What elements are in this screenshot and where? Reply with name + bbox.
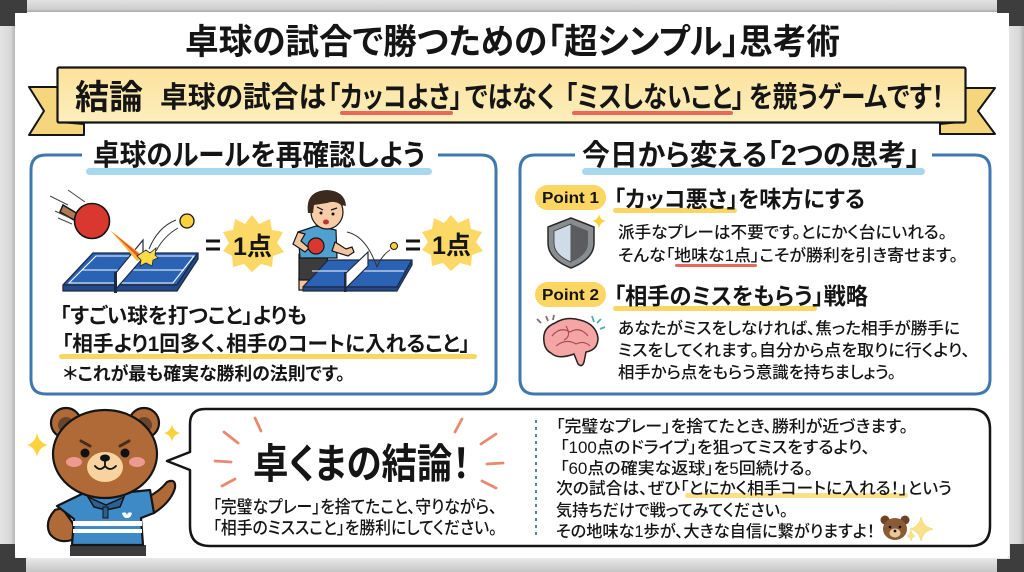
- closing message: 「完璧なプレー」を捨てたとき、勝利が近づきます。: [556, 416, 908, 436]
- closing message: 次の試合は、ぜひ「とにかく相手コートに入れる！」という: [556, 479, 952, 498]
- icon: shield: [548, 214, 606, 268]
- heading underline: [582, 168, 925, 175]
- underline: ミスしないこと: [572, 111, 733, 115]
- key rule text: 「相手より1回多く、相手のコートに入れること」: [62, 333, 470, 356]
- bubble heading: 卓くまの結論！: [253, 441, 470, 487]
- banner body: [58, 68, 966, 122]
- closing message: 気持ちだけで戦ってみてください。: [556, 501, 788, 520]
- equals sign: [406, 241, 420, 249]
- point 1 badge: Point 1: [542, 190, 599, 207]
- pants: [70, 545, 146, 556]
- panel: table tennis rules: [31, 139, 496, 394]
- ribbon tail: left: [29, 87, 84, 135]
- closing message: その地味な1歩が、大きな自信に繋がりますよ！: [556, 521, 875, 541]
- point 2 body: ミスをしてくれます。自分から点を取りに行くより、: [618, 341, 970, 360]
- point 2 body: [618, 318, 970, 382]
- bubble summary: 「完璧なプレー」を捨てたこと、守りながら、: [213, 497, 497, 517]
- left arm: [48, 508, 74, 541]
- ears: [51, 408, 159, 438]
- point 1 body: そんな「地味な1点」こそが勝利を引き寄せます。: [618, 245, 958, 265]
- shirt stripes and collar: [73, 497, 142, 533]
- ribbon tail: right: [940, 88, 995, 134]
- starburst: 1 point: 1点: [432, 232, 471, 260]
- banner message: を競うゲームです！: [749, 81, 944, 114]
- banner label: 結論: [75, 79, 143, 117]
- panel border: [31, 155, 496, 394]
- icon: sparkles: [907, 517, 933, 541]
- face: [66, 441, 145, 482]
- point 1 underline: [613, 208, 737, 213]
- banner message: 卓球の試合は: [160, 81, 326, 114]
- shirt: [57, 490, 154, 545]
- heading: 卓球のルールを再確認しよう: [93, 139, 425, 172]
- closing message: 「100点のドライブ」を狙ってミスをするより、: [560, 437, 870, 457]
- closing message: 「60点の確実な返球」を5回続ける。: [560, 459, 813, 478]
- point 2 badge: [535, 282, 606, 307]
- speech bubble: [167, 409, 990, 546]
- point 1 body: [618, 223, 958, 267]
- point 2 badge: Point 2: [542, 287, 599, 304]
- emphasis rays: [215, 418, 503, 488]
- banner message: [160, 81, 944, 114]
- bubble outline: [167, 409, 990, 546]
- conclusion banner: [29, 68, 995, 135]
- point 1 badge: [535, 185, 606, 210]
- banner message: 「カッコよさ」: [328, 81, 462, 114]
- panel: two mindset changes: [520, 139, 990, 394]
- point 1 heading: 「カッコ悪さ」を味方にする: [614, 186, 865, 212]
- banner message: ではなく: [465, 82, 555, 114]
- banner message: 「ミスしないこと」: [565, 81, 744, 114]
- panel border: [520, 155, 990, 394]
- starburst: 1 point: 1点: [233, 233, 272, 261]
- point 2 heading: 「相手のミスをもらう」戦略: [614, 283, 868, 309]
- note: ＊これが最も確実な勝利の法則です。: [63, 363, 345, 384]
- illustration: smash on table: [50, 190, 198, 293]
- heading: 今日から変える「2つの思考」: [582, 139, 920, 172]
- point 2 underline: [613, 306, 817, 311]
- point 2 body: 相手から点をもらう意識を持ちましょう。: [618, 363, 896, 382]
- rule text: 「すごい球を打つこと」よりも: [60, 304, 307, 328]
- heading underline: [86, 168, 432, 175]
- illustration: second table with ball: [303, 232, 412, 292]
- icon: brain: [537, 315, 605, 366]
- starburst: 1 point: [223, 215, 284, 272]
- sparkles: [27, 424, 180, 457]
- bear mascot: [27, 408, 180, 556]
- bubble summary: 「相手のミススこと」を勝利にしてください。: [213, 518, 497, 538]
- point 1 body: 派手なプレーは不要です。とにかく台にいれる。: [618, 223, 947, 242]
- equals sign: [206, 241, 220, 249]
- head: [53, 410, 157, 498]
- illustration: player returning: [293, 190, 354, 290]
- right arm: [148, 481, 175, 513]
- starburst: 1 point: [422, 215, 483, 271]
- dotted divider: [535, 420, 537, 537]
- underline: カッコよさ: [340, 111, 453, 115]
- bubble summary: [213, 497, 497, 538]
- closing message: [556, 416, 952, 541]
- highlight underline: [59, 354, 477, 359]
- point 2 body: あなたがミスをしなければ、焦った相手が勝手に: [618, 318, 960, 338]
- title: 卓球の試合で勝つための「超シンプル」思考術: [185, 23, 840, 62]
- icon: small bear: [880, 516, 910, 540]
